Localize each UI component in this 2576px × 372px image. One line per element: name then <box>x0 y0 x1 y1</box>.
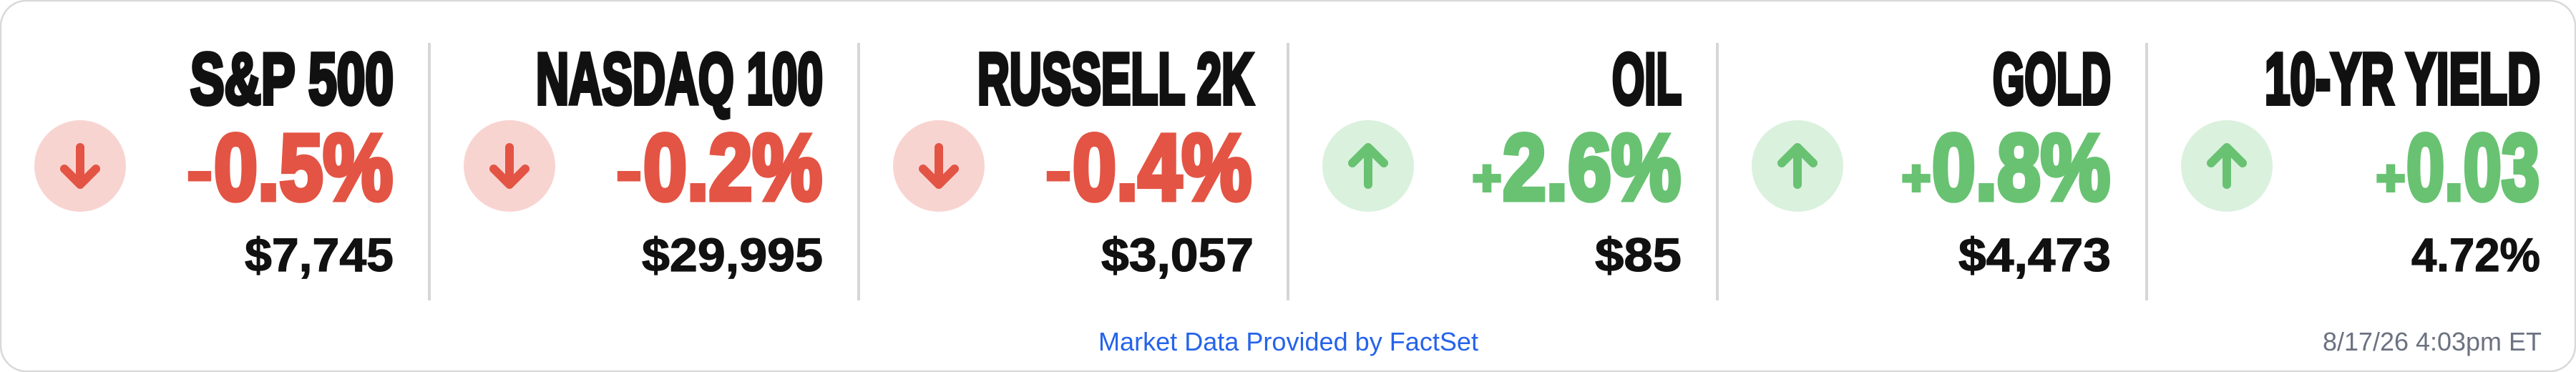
icon: up arrow <box>1322 120 1414 212</box>
change: +2.6%: 2.6% <box>1503 114 1681 220</box>
timestamp: 8/17/26 4:03pm ET <box>2323 327 2542 356</box>
change: +2.6%: + <box>1473 151 1501 205</box>
change: +0.8%: + <box>1902 151 1931 205</box>
panel: S&P 500 <box>34 39 394 281</box>
label: GOLD: GOLD <box>1993 39 2111 119</box>
price: $4,473: $4,473 <box>1958 228 2111 281</box>
change: -0.2%: 0.2% <box>643 114 822 220</box>
panel: RUSSELL 2K <box>893 39 1254 281</box>
label: OIL: OIL <box>1612 39 1682 119</box>
label: RUSSELL 2K: RUSSELL 2K <box>977 39 1254 119</box>
icon: down arrow <box>464 120 555 212</box>
icon: up arrow <box>1752 120 1843 212</box>
icon: up arrow <box>2181 120 2273 212</box>
price: $29,995: $29,995 <box>642 228 823 281</box>
panel: GOLD <box>1752 39 2111 281</box>
icon: down arrow <box>893 120 985 212</box>
panel: OIL <box>1322 39 1682 281</box>
change: -0.4%: 0.4% <box>1073 114 1252 220</box>
label: NASDAQ 100: NASDAQ 100 <box>536 39 823 119</box>
label: S&P 500: S&P 500 <box>190 39 394 119</box>
change: -0.2%: - <box>617 140 641 203</box>
price: 4.72%: 4.72% <box>2411 228 2540 281</box>
panel: NASDAQ 100 <box>464 39 823 281</box>
price: $3,057: $3,057 <box>1101 228 1254 281</box>
change: -0.5%: 0.5% <box>214 114 393 220</box>
source note: Market Data Provided by FactSet <box>1098 327 1478 356</box>
change: +0.03: + <box>2376 151 2405 205</box>
change: -0.4%: - <box>1046 140 1070 203</box>
change: -0.5%: - <box>187 140 212 203</box>
panel: 10-YR YIELD <box>2181 39 2540 281</box>
price: $85: $85 <box>1595 228 1682 281</box>
price: $7,745: $7,745 <box>245 228 394 281</box>
change: +0.8%: 0.8% <box>1932 114 2110 220</box>
icon: down arrow <box>34 120 126 212</box>
